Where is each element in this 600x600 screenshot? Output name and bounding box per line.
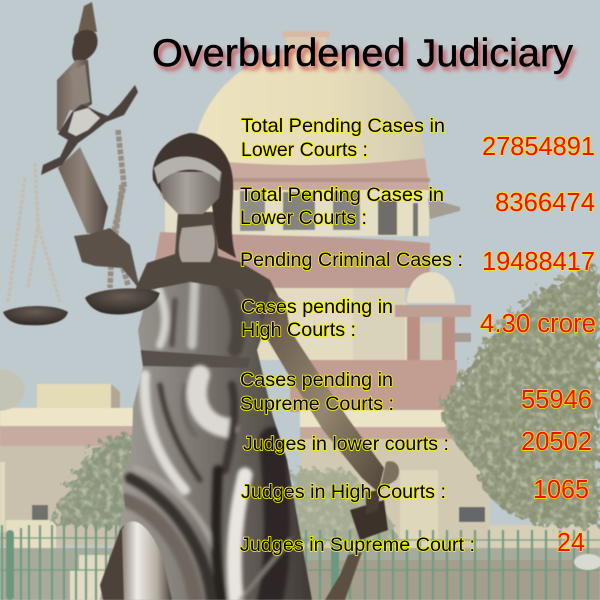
stat: judges in supreme court <box>240 529 585 557</box>
dress belt <box>140 350 250 368</box>
right scale chain <box>110 130 128 288</box>
arm drapery <box>74 228 140 290</box>
stat: judges in lower courts: Judges in lower courts : <box>243 433 449 455</box>
left wing of building <box>0 369 135 550</box>
stat: cases pending in supreme courts: Cases pending in <box>240 369 393 391</box>
stat: pending criminal cases <box>240 248 595 276</box>
stat: cases pending in supreme courts: Supreme Courts : <box>240 393 394 415</box>
stat: judges in lower courts: 20502 <box>521 428 592 456</box>
stat: judges in supreme court: 24 <box>557 529 585 557</box>
sword in raised hand <box>72 2 98 64</box>
stat: pending criminal cases: 19488417 <box>482 248 595 276</box>
dress and torso <box>100 282 312 600</box>
pedestal <box>70 570 105 600</box>
stat: total pending cases in lower courts, 27854891 <box>241 115 595 161</box>
stat: cases pending in high courts: Cases pending in <box>241 296 393 318</box>
stat: judges in high courts: 1065 <box>533 476 589 504</box>
dark cloth behind thigh <box>100 525 126 600</box>
stat: total pending cases in lower courts, 27854891: Lower Courts : <box>241 139 368 161</box>
right wing of building <box>300 410 600 560</box>
stat: cases pending in high courts: 4.30 crore <box>480 310 596 338</box>
stat: judges in supreme court: Judges in Supreme Court : <box>240 534 475 556</box>
stat: cases pending in supreme courts: 55946 <box>521 386 592 414</box>
scale beam and hand <box>41 85 138 175</box>
left scale chains <box>8 163 60 302</box>
stat: judges in high courts: Judges in High Courts : <box>241 481 446 503</box>
stat: cases pending in high courts <box>241 296 596 341</box>
stat: cases pending in supreme courts <box>240 369 592 415</box>
stat: total pending cases in lower courts, 8366474 <box>240 184 595 229</box>
stat: total pending cases in lower courts, 27854891: 27854891 <box>482 133 595 161</box>
face <box>158 172 222 214</box>
hair <box>153 133 236 258</box>
small cupola and pavilion <box>395 272 471 362</box>
sword hilt and blade <box>325 461 399 600</box>
title: Overburdened Judiciary <box>155 36 577 79</box>
dress folds <box>125 270 290 600</box>
statue: Lady Justice <box>3 2 399 600</box>
blindfold <box>154 157 221 184</box>
raised arm <box>57 60 108 236</box>
stat: judges in high courts <box>241 476 589 504</box>
stat: judges in lower courts <box>243 428 592 456</box>
red sandstone block <box>290 360 457 412</box>
trees <box>442 268 600 527</box>
exposed thigh <box>122 521 172 600</box>
title: Overburdened Judiciary <box>152 32 574 75</box>
stat: total pending cases in lower courts, 8366474: 8366474 <box>495 189 595 217</box>
stat: pending criminal cases: Pending Criminal Cases : <box>240 249 463 271</box>
lower dome building wall <box>190 288 412 360</box>
stat: total pending cases in lower courts, 8366474: Lower Courts : <box>240 207 367 229</box>
left scale pan <box>3 306 68 325</box>
stat: total pending cases in lower courts, 27854891: Total Pending Cases in <box>241 115 445 137</box>
ground shrubs <box>0 548 600 600</box>
lowered arm <box>262 290 384 492</box>
main dome with finial <box>193 31 425 172</box>
stat: cases pending in high courts: High Courts : <box>241 319 356 341</box>
stat: total pending cases in lower courts, 8366474: Total Pending Cases in <box>240 184 444 206</box>
fence <box>0 525 600 600</box>
neck and shoulders <box>135 212 280 320</box>
drum and colonnade <box>150 154 460 288</box>
right scale pan <box>85 288 160 314</box>
